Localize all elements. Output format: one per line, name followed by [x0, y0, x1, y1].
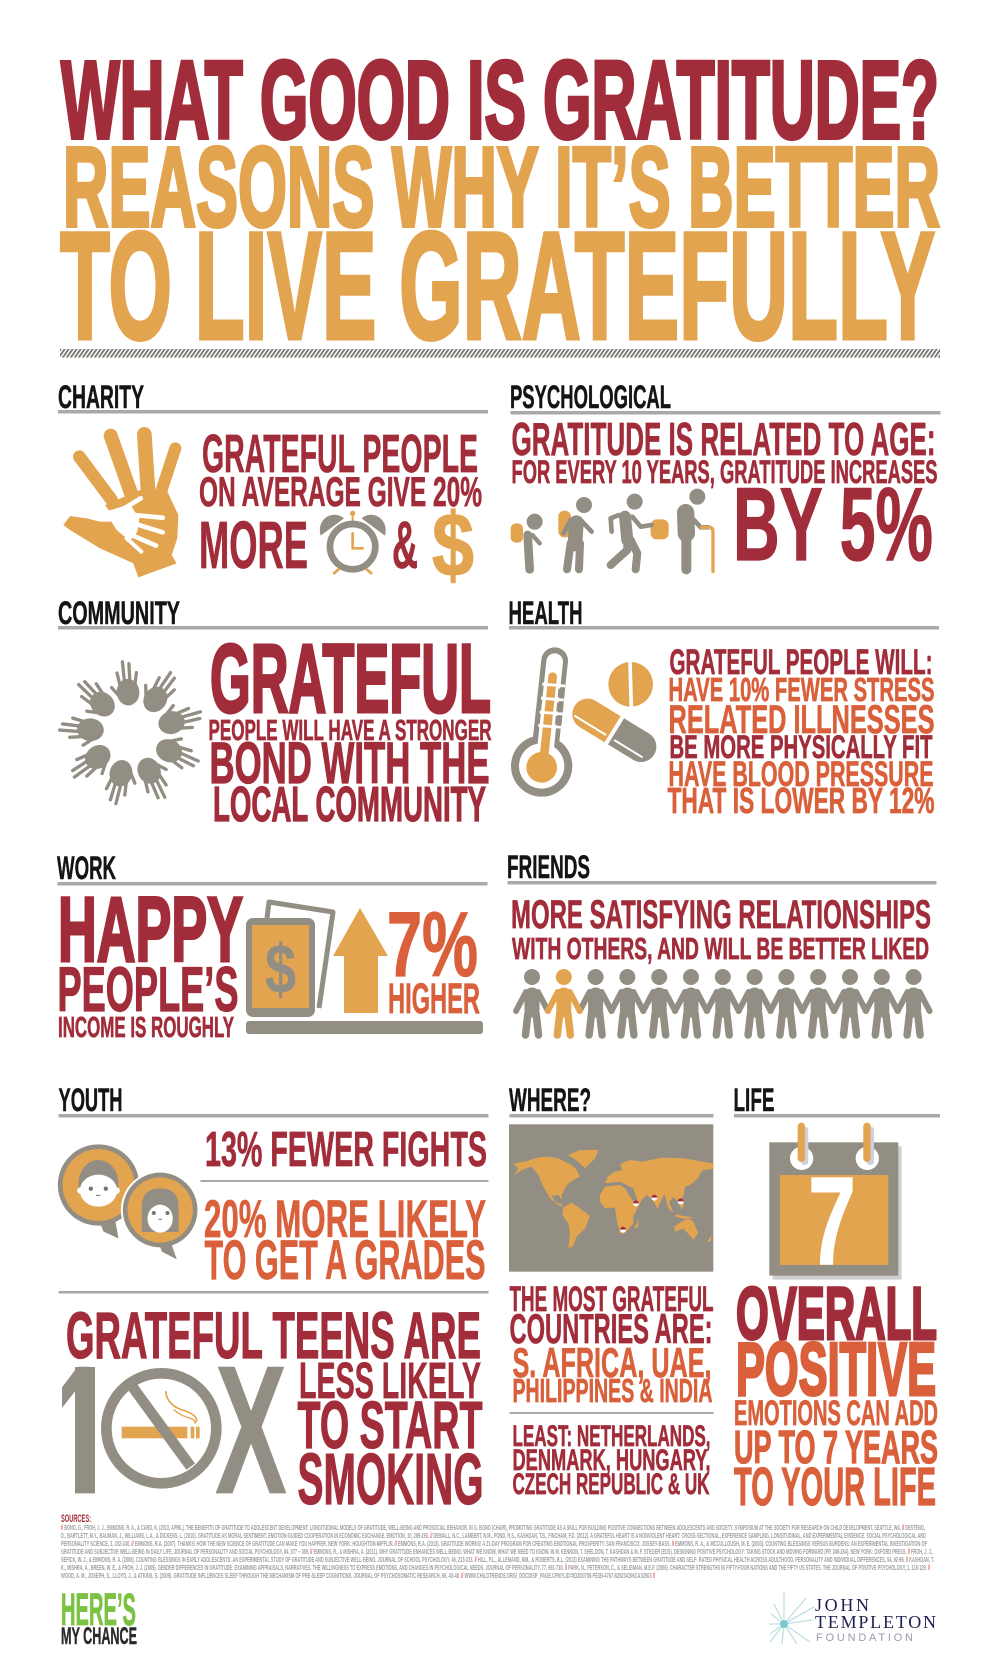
text: the most grateful: THE MOST GRATEFUL	[510, 1280, 714, 1319]
text: happy: HAPPY	[58, 879, 243, 981]
base bar	[246, 1021, 483, 1034]
icon: helping hands	[63, 434, 178, 577]
text: income is roughly: INCOME IS ROUGHLY	[58, 1012, 234, 1044]
number: 10x: X	[215, 1327, 287, 1532]
title block	[60, 39, 940, 372]
text: bond with the: BOND WITH THE	[210, 731, 490, 796]
text: people's: PEOPLE’S	[58, 955, 238, 1025]
panel: charity	[58, 379, 488, 596]
sources text	[61, 1523, 934, 1580]
icon: thermometer	[511, 661, 572, 797]
text: on average give 20%: ON AVERAGE GIVE 20%	[199, 468, 482, 515]
text: ampersand: &	[392, 508, 418, 583]
number: 10x	[62, 1366, 286, 1494]
text: smoking: SMOKING	[298, 1440, 484, 1520]
icon: up arrow	[333, 908, 388, 1013]
logo: john templeton foundation: TEMPLETON	[815, 1612, 936, 1632]
panel: youth	[56, 1082, 488, 1532]
icon: starburst	[769, 1592, 814, 1644]
text: 13% fewer fights: 13% FEWER FIGHTS	[205, 1123, 487, 1177]
text: people will have a stronger: PEOPLE WILL HAVE A STRONGER	[208, 715, 492, 747]
logo: john templeton foundation: FOUNDATION	[816, 1632, 913, 1644]
sources	[61, 1513, 934, 1580]
text: countries are: COUNTRIES ARE:	[510, 1305, 712, 1352]
text: grateful: GRATEFUL	[210, 624, 491, 733]
heading: charity: CHARITY	[58, 379, 144, 415]
icon: no smoking	[106, 1373, 216, 1483]
heading: friends: FRIENDS	[507, 849, 590, 885]
icon: pills	[566, 660, 663, 769]
heading: where: WHERE?	[509, 1082, 591, 1118]
panel: where	[509, 1082, 714, 1501]
icon: speech bubbles with faces	[58, 1144, 199, 1259]
text: less likely: LESS LIKELY	[299, 1352, 481, 1409]
heading: work: WORK	[57, 850, 116, 886]
logo: here's my chance	[61, 1584, 137, 1650]
icon: calendar: 7	[808, 1152, 856, 1291]
text: 7%: 7%	[387, 894, 478, 996]
panel: work	[57, 850, 488, 1044]
logo: john templeton foundation: JOHN	[815, 1595, 869, 1615]
logo: here's my chance: MY CHANCE	[61, 1623, 137, 1650]
icon: circle of hands	[59, 661, 204, 807]
text: philippines & india: PHILIPPINES & INDIA	[512, 1372, 712, 1409]
heading: community: COMMUNITY	[58, 595, 180, 631]
icon: people ageing	[511, 489, 713, 572]
infographic canvas: HERE’S	[61, 1584, 136, 1635]
heading: health: HEALTH	[508, 595, 582, 631]
icon: dollar sign: $	[432, 496, 474, 596]
icon: chain of people	[516, 969, 930, 1035]
panel: psychological	[510, 379, 940, 583]
number: 10x: 1	[56, 1327, 106, 1532]
sources text: WOOD, A. M., JOSEPH, S., LLOYD, J., & ATKINS, S. (2009). GRATITUDE INFLUENCES SLEEP THROUGH THE MECHANISM OF PRE-SLEEP COGNITIONS. JOURNAL OF PSYCHOSOMATIC RESEARCH, 66, 43-48. // WWW.CHILDTRENDS.ORG/_DOCDISP_PAGE.CFM?LID=5D2D0758-FE3B-4767-825234106CA32503 //	[61, 1571, 655, 1580]
icon: banknotes: $	[265, 930, 296, 1008]
text: 20% more likely: 20% MORE LIKELY	[204, 1190, 486, 1249]
text: denmark hungary: DENMARK, HUNGARY,	[512, 1444, 710, 1477]
panel: community	[58, 595, 492, 832]
text: least netherlands: LEAST: NETHERLANDS,	[512, 1420, 710, 1453]
text: grateful people: GRATEFUL PEOPLE	[202, 424, 478, 484]
text: higher: HIGHER	[388, 975, 480, 1023]
heading: life: LIFE	[734, 1082, 774, 1118]
text: local community: LOCAL COMMUNITY	[213, 778, 486, 832]
world map	[509, 1124, 713, 1272]
icon: banknotes	[246, 902, 333, 1017]
text: more: MORE	[199, 508, 308, 583]
text: czech republic & uk: CZECH REPUBLIC & UK	[512, 1468, 710, 1501]
sources heading: SOURCES:	[61, 1513, 91, 1525]
icon: calendar	[769, 1123, 902, 1291]
text: to get a grades: TO GET A GRADES	[204, 1228, 486, 1291]
panel: friends	[507, 849, 936, 1035]
panel: life	[734, 1082, 940, 1517]
text: grateful teens are: GRATEFUL TEENS ARE	[66, 1298, 481, 1372]
text: s. africa, uae: S. AFRICA, UAE,	[512, 1339, 712, 1386]
heading: youth: YOUTH	[58, 1082, 122, 1118]
icon: alarm clock	[320, 511, 386, 573]
text: to start: TO START	[298, 1388, 483, 1463]
heading: psychological: PSYCHOLOGICAL	[510, 379, 671, 415]
panel: health	[508, 595, 939, 821]
logo: john templeton foundation	[769, 1592, 936, 1644]
